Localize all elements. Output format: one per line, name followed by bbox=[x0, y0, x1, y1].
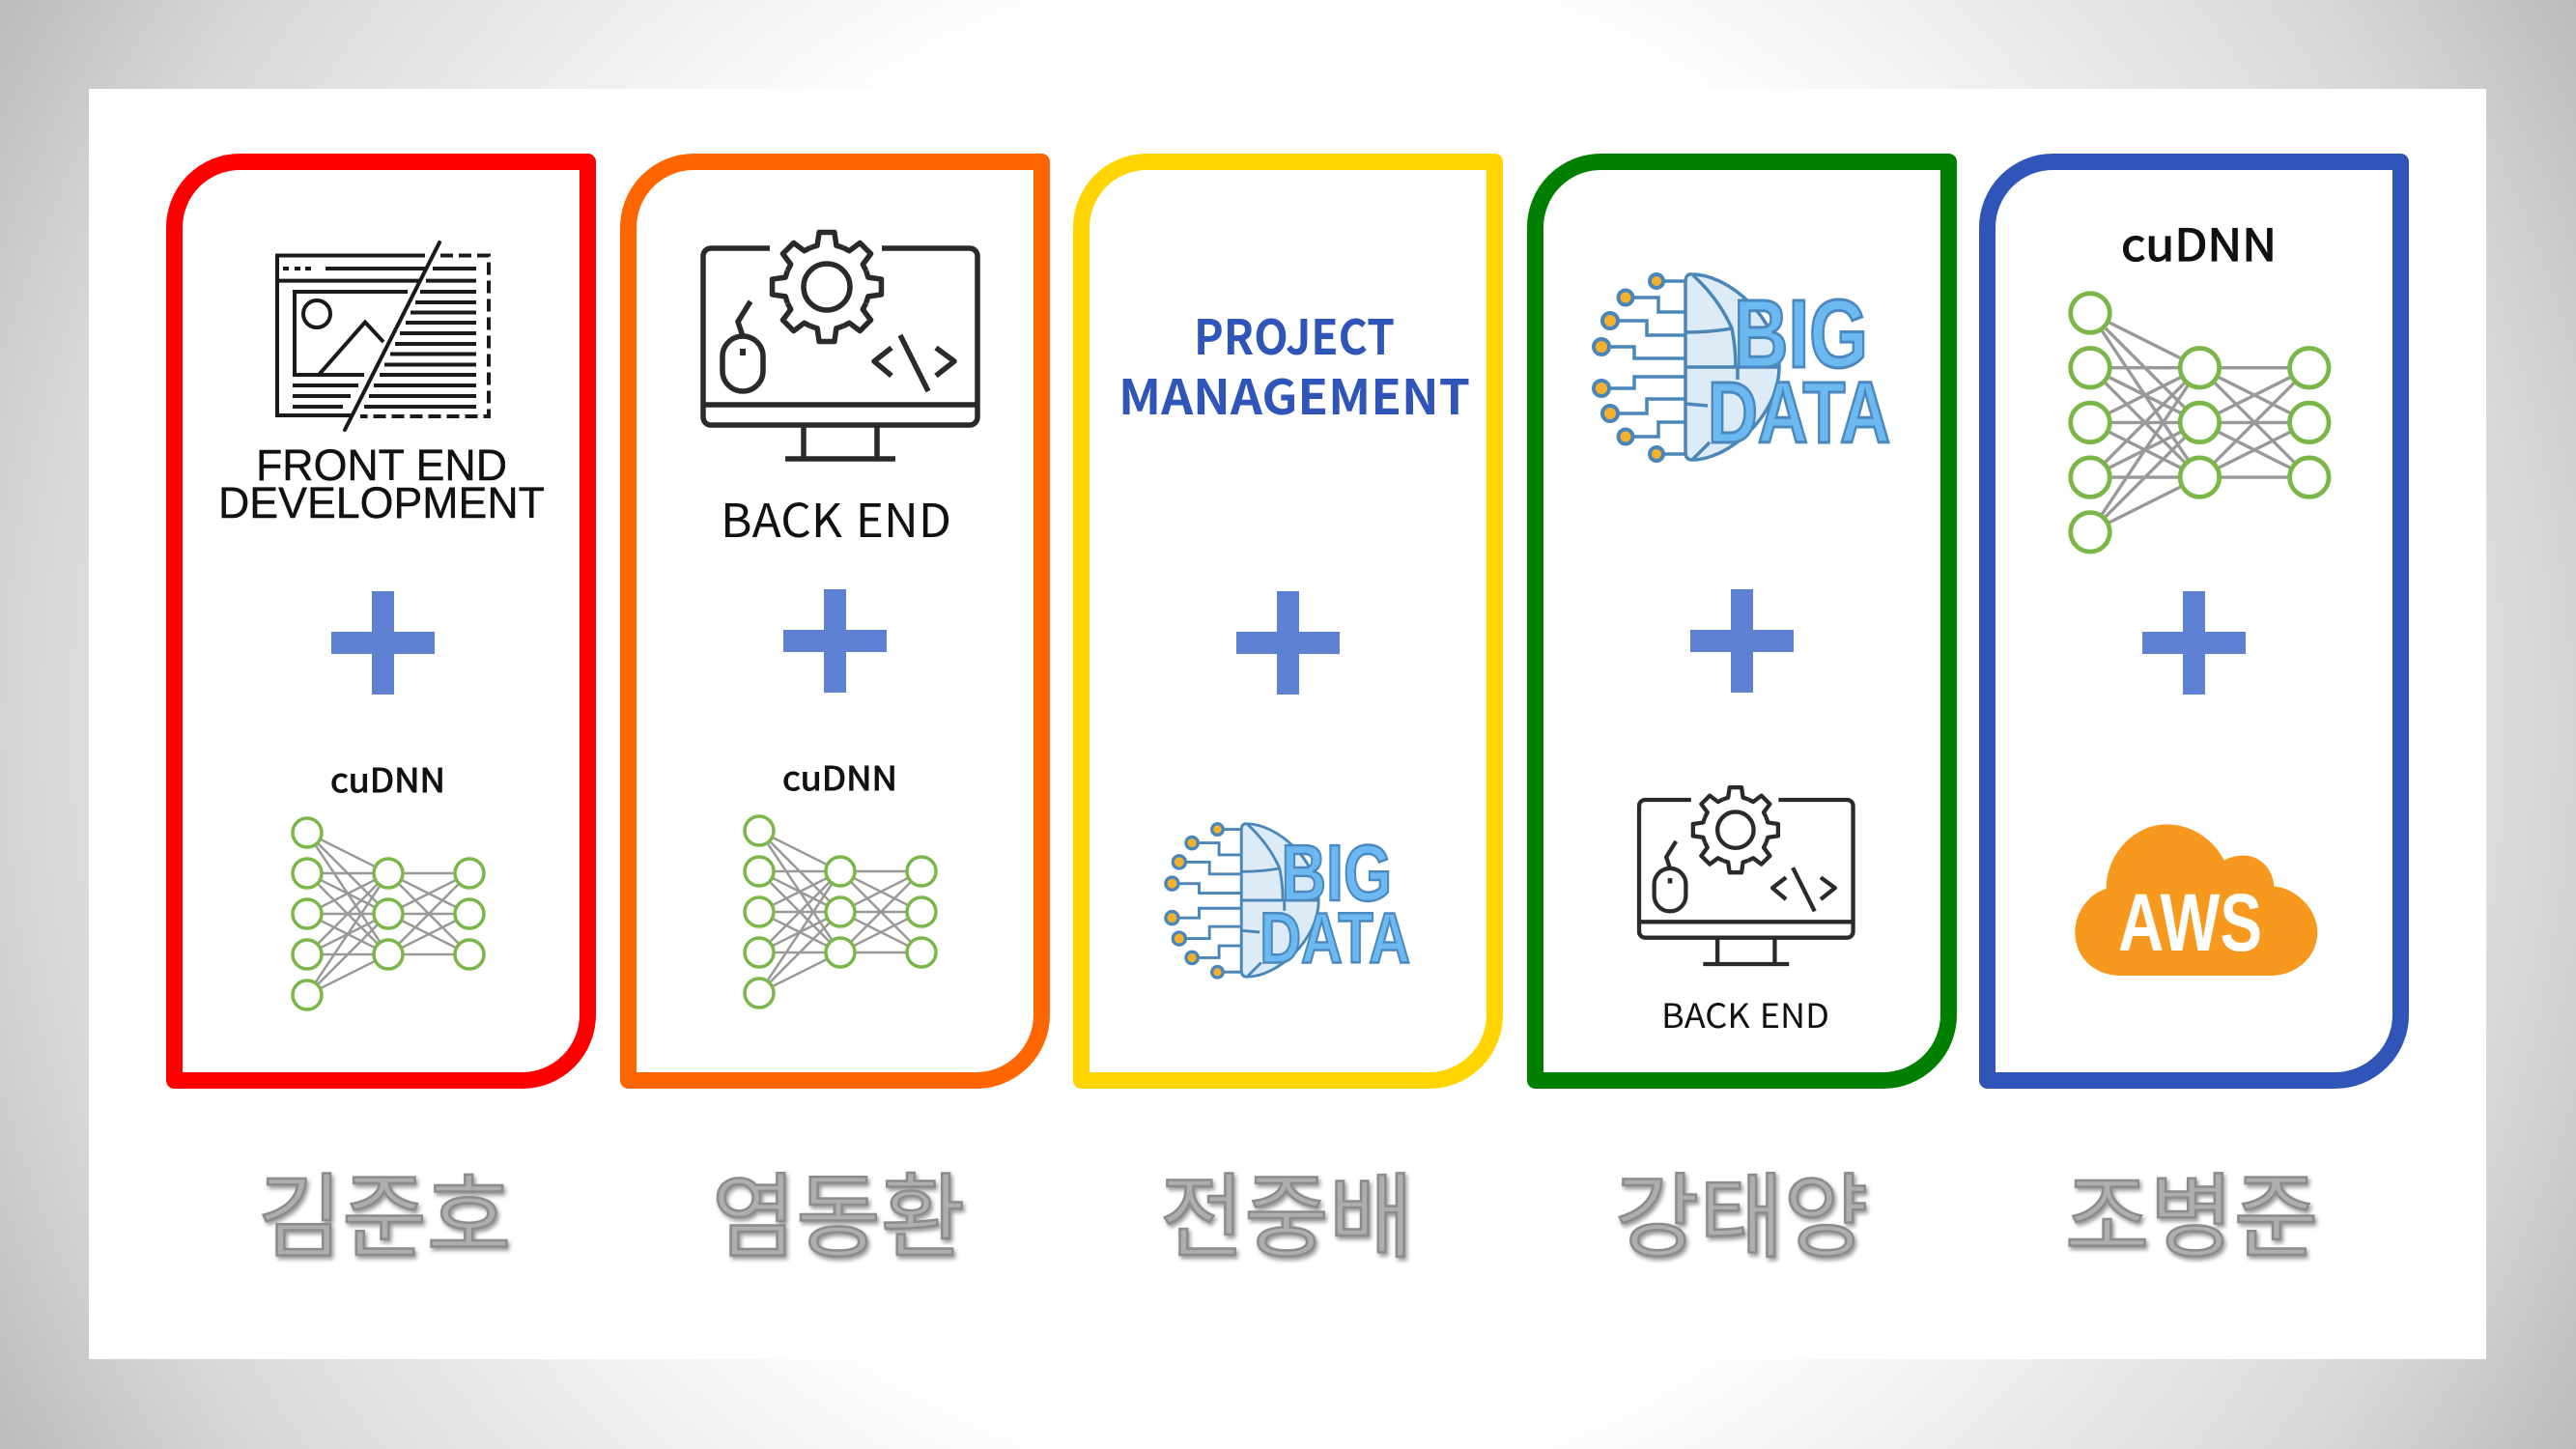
name: 조병준: 조병준 bbox=[2065, 1144, 2318, 1276]
icon: big data: DATA bbox=[1708, 365, 1890, 462]
icon: big data: DATA bbox=[1260, 897, 1410, 978]
panel: 조병준 bbox=[1988, 162, 2401, 1080]
icon: back end monitor bbox=[1639, 787, 1854, 964]
icon: AWS cloud bbox=[2075, 824, 2317, 976]
label: project management: MANAGEMENT bbox=[1118, 359, 1470, 429]
label: cuDNN: cuDNN bbox=[2121, 211, 2277, 274]
plus sign bbox=[1236, 591, 1340, 695]
panel border: green bbox=[1536, 162, 1949, 1080]
panel border: orange bbox=[628, 162, 1042, 1080]
label: cuDNN: cuDNN bbox=[782, 753, 897, 800]
icon: neural network bbox=[293, 818, 484, 1009]
icon: front end development bbox=[277, 242, 489, 430]
plus sign bbox=[1690, 589, 1794, 693]
panel: 김준호 bbox=[174, 162, 588, 1080]
icon: big data bbox=[1166, 824, 1410, 978]
plus sign bbox=[2142, 591, 2246, 695]
icon: AWS cloud: AWS bbox=[2118, 877, 2262, 968]
label: front end development: DEVELOPMENT bbox=[218, 478, 545, 527]
label: cuDNN: cuDNN bbox=[330, 754, 445, 802]
icon: neural network bbox=[745, 816, 936, 1008]
name: 염동환: 염동환 bbox=[712, 1144, 965, 1276]
panel border: blue bbox=[1988, 162, 2401, 1080]
panel: 전중배 bbox=[1082, 162, 1495, 1080]
icon: big data bbox=[1594, 274, 1890, 462]
label: back end: BACK END bbox=[721, 483, 951, 551]
icon: back end monitor bbox=[703, 233, 977, 459]
name: 전중배: 전중배 bbox=[1160, 1144, 1413, 1276]
panel: 강태양 bbox=[1536, 162, 1949, 1080]
icon: neural network bbox=[2071, 294, 2329, 552]
icon: big data: BIG bbox=[1734, 280, 1868, 388]
panel border: red bbox=[174, 162, 588, 1080]
name: 김준호: 김준호 bbox=[258, 1144, 511, 1276]
label: front end development: FRONT END bbox=[256, 440, 507, 490]
name: 강태양: 강태양 bbox=[1615, 1144, 1868, 1276]
panel border: yellow bbox=[1082, 162, 1495, 1080]
label: back end: BACK END bbox=[1661, 989, 1829, 1038]
label: project management: PROJECT bbox=[1194, 299, 1395, 369]
plus sign bbox=[331, 591, 435, 695]
panel: 염동환 bbox=[628, 162, 1042, 1080]
plus sign bbox=[783, 589, 887, 693]
icon: big data: BIG bbox=[1281, 829, 1392, 918]
